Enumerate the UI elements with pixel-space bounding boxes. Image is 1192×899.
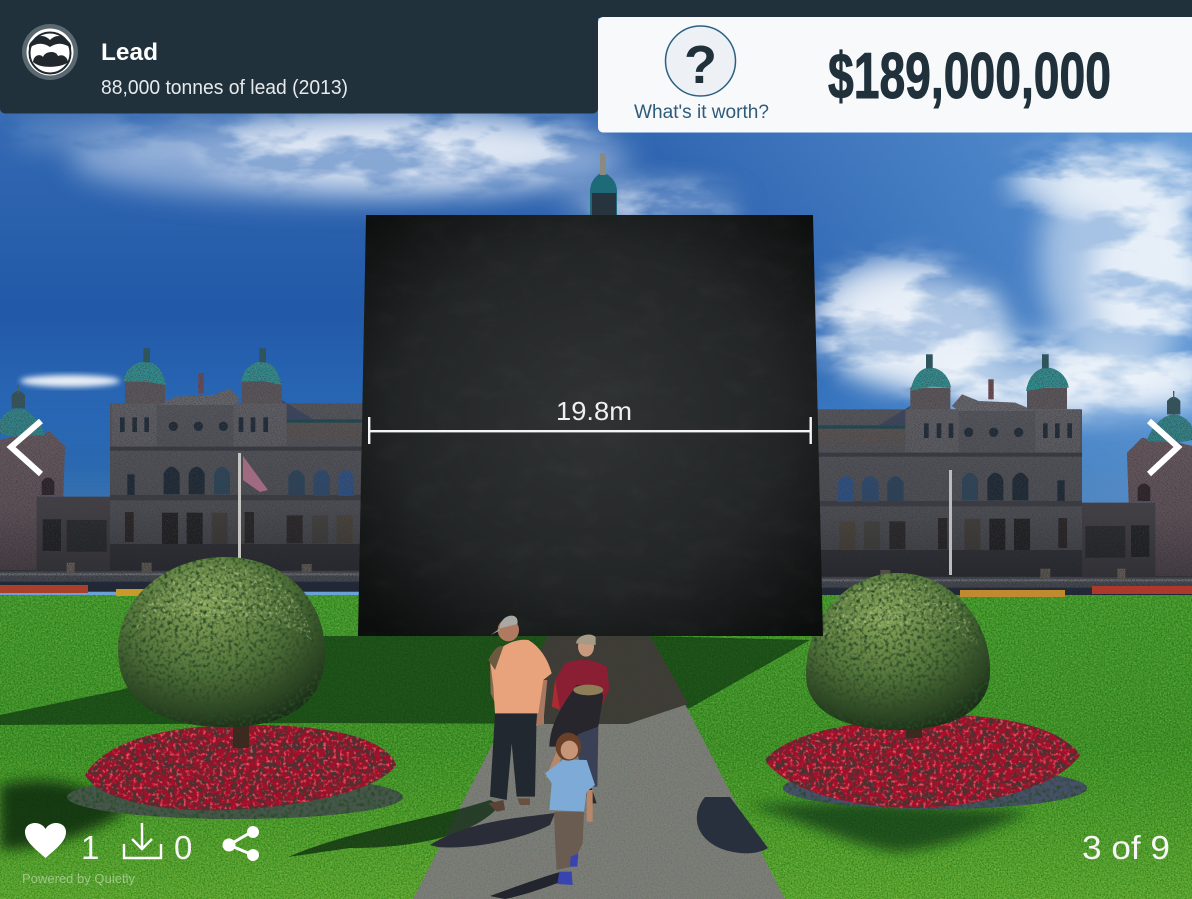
clouds [10,114,1192,415]
central tower behind the cube [590,153,617,215]
panel: value [598,17,1192,132]
top strip [0,0,1192,18]
download count: 0 [174,829,192,866]
subheading: 88,000 tonnes of lead (2013) [101,77,348,99]
icon: lead element badge [22,24,78,80]
value label: What's it worth? [634,102,769,123]
flag pole, right [949,470,952,575]
panel: lead title [0,0,598,114]
people on the path, coordinates in 3x zoom units [488,616,609,885]
dimension label: 19.8m [556,396,632,426]
left bush with flower bed [67,557,403,819]
dimension line [368,417,812,444]
path [413,636,785,899]
flower beds along balustrade [0,585,1192,597]
woman [549,635,609,803]
lawn [0,595,1192,899]
lead cube [358,215,823,636]
icon: question mark: ? [684,35,717,95]
icon: heart [25,823,66,858]
sky [0,0,1192,620]
left parliament building [0,348,393,592]
icon: download [124,823,161,858]
icon: question mark [666,26,736,96]
social actions [25,823,259,866]
right navigation arrow [1149,421,1178,474]
slide counter: 3 of 9 [1082,829,1170,866]
right parliament building [805,354,1192,598]
heading: Lead [101,39,158,66]
attribution: Powered by Quietly [22,871,135,886]
flag, left [238,453,268,559]
child [545,733,595,885]
like count: 1 [81,829,99,866]
cube shadow on lawn [0,636,810,725]
ground shadows [0,780,1030,899]
man [488,616,552,812]
icon: share [222,826,259,861]
right bush with flower bed [765,573,1087,809]
left navigation arrow [11,421,41,474]
